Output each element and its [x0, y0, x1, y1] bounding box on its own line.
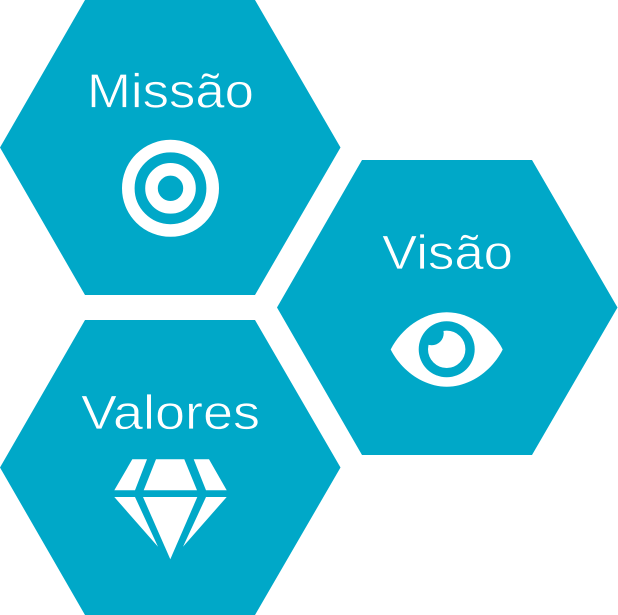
hexagon: Visão background: [277, 160, 618, 455]
hexagon: Valores background: [0, 320, 340, 615]
panel: Missão: [0, 0, 340, 295]
heading: Missão: Missão: [87, 66, 254, 118]
icon: eye: [391, 312, 503, 387]
heading: Visão: Visão: [382, 227, 513, 280]
panel: Visão: [277, 160, 618, 455]
panel: Valores: [0, 320, 340, 615]
heading: Valores: Valores: [81, 387, 260, 440]
icon: target: [128, 146, 213, 230]
hexagon: Missão background: [0, 0, 340, 295]
icon: diamond: [114, 459, 227, 559]
